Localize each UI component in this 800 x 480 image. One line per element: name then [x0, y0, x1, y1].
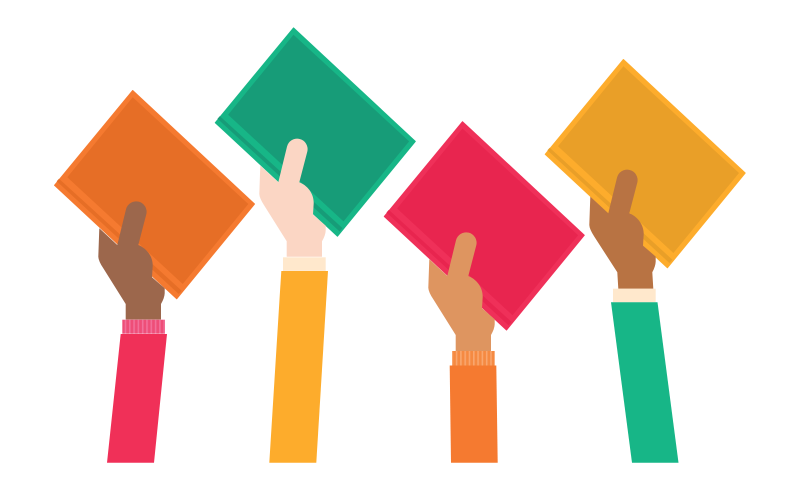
- hand: light skin: [259, 139, 326, 257]
- hand: tan skin: [428, 232, 495, 352]
- panel: green book with hand and yellow sleeve: [215, 28, 415, 463]
- shirt cuff: cream: [283, 257, 326, 271]
- book: orange: [54, 90, 254, 299]
- sweater cuff: orange ribbed: [452, 351, 495, 366]
- panel: orange book with hand and pink sleeve: [54, 90, 254, 463]
- sleeve: orange: [450, 366, 498, 463]
- book: yellow: [545, 60, 745, 268]
- sleeve: green: [611, 302, 678, 463]
- sleeve: pink: [107, 334, 167, 463]
- shirt cuff: cream: [613, 289, 656, 302]
- panel: red book with hand and orange sleeve: [384, 122, 584, 463]
- panel: yellow book with hand and green sleeve: [545, 60, 745, 463]
- sweater cuff: pink ribbed: [122, 320, 165, 334]
- book: green: [215, 28, 415, 236]
- hand: medium brown skin: [589, 170, 656, 289]
- book: red: [384, 122, 584, 330]
- sleeve: yellow: [269, 271, 328, 463]
- hand: brown skin: [98, 201, 165, 320]
